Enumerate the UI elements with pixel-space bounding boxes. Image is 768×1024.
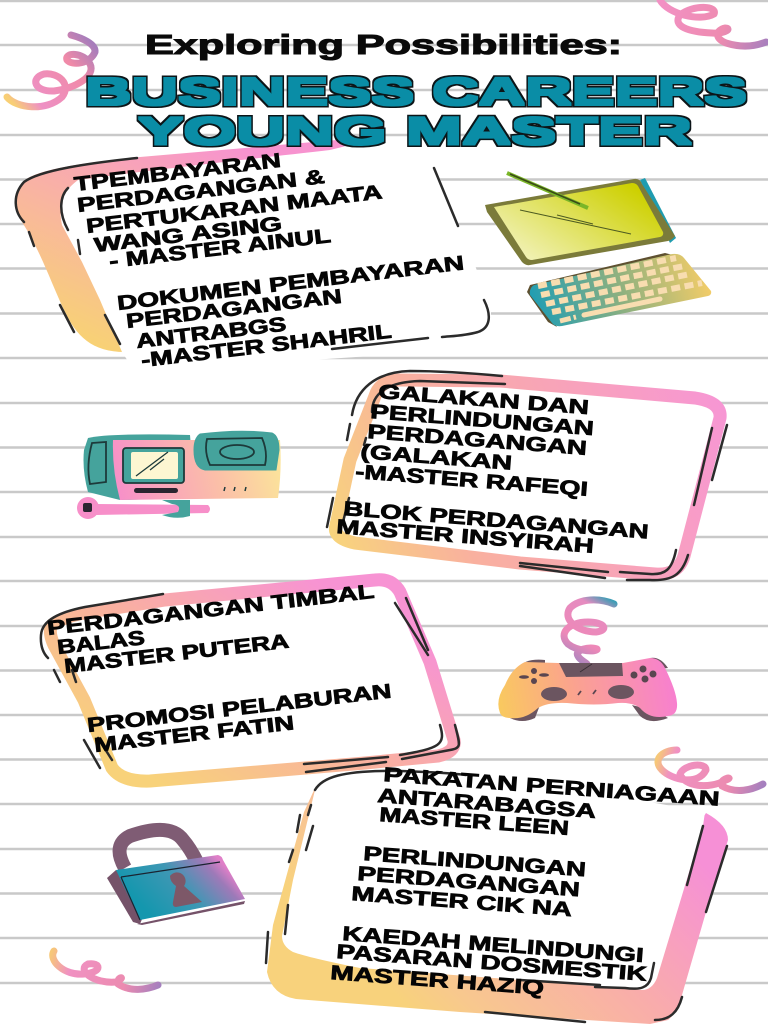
panel frame and white card (50, 580, 454, 781)
panel: international business (266, 764, 728, 1024)
panel text: (GALAKAN (360, 441, 513, 475)
panel text: PERDAGANGAN (367, 421, 588, 460)
panel text (46, 581, 393, 757)
panel sketch strokes (266, 771, 727, 1022)
panel text: ANTRABGS (135, 313, 288, 353)
panel white card (282, 772, 705, 990)
panel text: PERLINDUNGAN (363, 843, 587, 881)
panel: reciprocal trade (41, 580, 459, 781)
panel text (73, 150, 465, 372)
panel text: PROMOSI PELABURAN (86, 680, 393, 737)
panel frame band (15, 138, 400, 352)
icon: keyboard (527, 253, 711, 327)
panel sketch strokes (16, 158, 489, 349)
panel: trade payments (15, 138, 491, 372)
panel text: -MASTER SHAHRIL (140, 321, 393, 372)
subtitle: Exploring Possibilities: (145, 29, 622, 60)
panel text: MASTER INSYIRAH (336, 516, 595, 558)
panel frame band (267, 788, 728, 1024)
main title line one: BUSINESS CAREERS (85, 72, 747, 114)
panel text: KAEDAH MELINDUNGI (342, 923, 644, 967)
panel text: MASTER LEEN (379, 804, 570, 840)
icon: padlock (107, 830, 245, 925)
panel: trade promotion (327, 371, 727, 580)
panel text: PERDAGANGAN & (76, 166, 326, 217)
panel text: PERLINDUNGAN (370, 401, 595, 440)
icon: camera (77, 431, 281, 519)
panel text: DOKUMEN PEMBAYARAN (116, 252, 465, 315)
panel text: BALAS (56, 627, 146, 659)
panel text: PAKATAN PERNIAGAAN (383, 764, 720, 811)
panel text: PERDAGANGAN (357, 863, 581, 901)
panel text: PERDAGANGAN (125, 286, 343, 333)
panel text: PERDAGANGAN TIMBAL (46, 581, 375, 640)
panel text: MASTER CIK NA (351, 883, 573, 921)
panel text: GALAKAN DAN (378, 381, 590, 419)
panel text: MASTER PUTERA (63, 631, 290, 678)
squiggle: bottom left (53, 951, 158, 989)
icon: tablet and keyboard (485, 173, 711, 327)
panel text: MASTER FATIN (93, 712, 295, 757)
panel text: BLOK PERDAGANGAN (343, 498, 649, 543)
panel text: MASTER HAZIQ (330, 962, 545, 1000)
panel white card (61, 142, 491, 372)
title block (85, 29, 747, 153)
panel text: PERTUKARAN MAATA (85, 181, 384, 238)
panel text: -MASTER RAFEQI (355, 461, 589, 501)
panel text (336, 381, 649, 558)
controller squiggle (564, 600, 614, 664)
squiggle: top left (7, 35, 95, 107)
panel text: PASARAN DOSMESTIK (336, 941, 648, 986)
panel sketch strokes (41, 594, 459, 772)
panel text (330, 764, 720, 1000)
panel text: WANG ASING (93, 213, 283, 257)
main title line two: YOUNG MASTER (138, 111, 692, 153)
icon: tablet (485, 173, 676, 265)
icon: game controller (498, 600, 677, 721)
squiggle: top right (660, 0, 766, 46)
panel text: TPEMBAYARAN (73, 150, 282, 196)
panel sketch strokes (327, 371, 727, 580)
panel text: - MASTER AINUL (108, 225, 332, 273)
panel frame and white card (335, 380, 720, 574)
squiggle: right of panel four (658, 750, 763, 790)
panel text: ANTARABAGSA (377, 785, 597, 823)
